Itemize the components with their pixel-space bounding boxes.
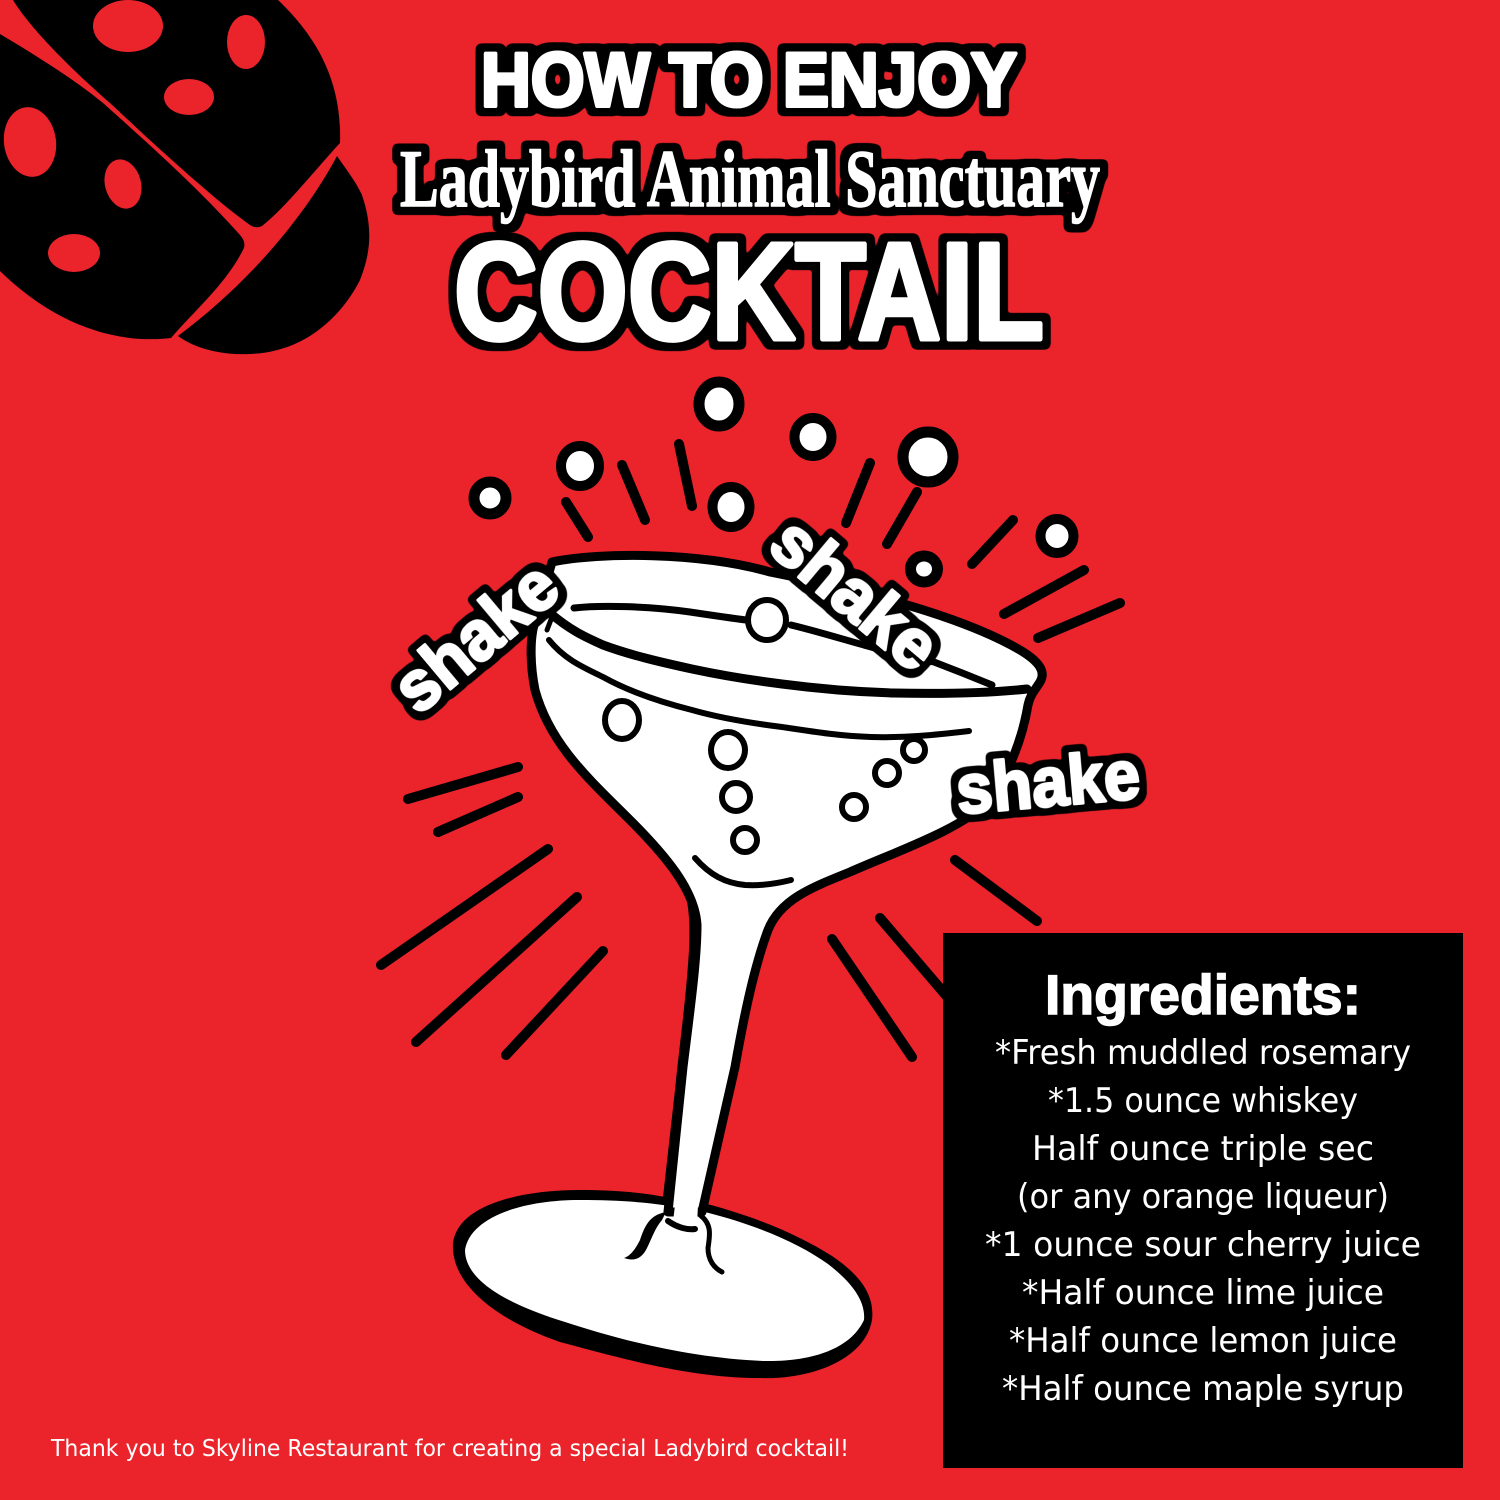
- ingredient list: *Half ounce maple syrup: [1002, 1369, 1404, 1409]
- label: shake left: shake: [378, 546, 573, 728]
- icon: ladybird: [0, 0, 369, 354]
- glass foot: [453, 1190, 872, 1378]
- glass body: [531, 555, 1042, 1212]
- ingredient list: *Half ounce lemon juice: [1009, 1321, 1397, 1361]
- title: [400, 38, 1100, 369]
- stem left thick edge: [596, 785, 698, 1197]
- panel: ingredients: [943, 933, 1463, 1468]
- ingredient list: (or any orange liqueur): [1017, 1177, 1389, 1217]
- ingredient list: *1.5 ounce whiskey: [1048, 1081, 1358, 1121]
- bubbles in glass: [605, 600, 925, 852]
- title: COCKTAIL: [454, 215, 1044, 369]
- ingredient list: *Fresh muddled rosemary: [995, 1033, 1411, 1073]
- label: shake right: shake: [953, 735, 1143, 829]
- ingredient list: [985, 1033, 1421, 1409]
- ingredient list: *1 ounce sour cherry juice: [985, 1225, 1421, 1265]
- ingredient list: Half ounce triple sec: [1032, 1129, 1374, 1169]
- heading: ingredients: Ingredients:: [1045, 963, 1361, 1026]
- stem left foot curl: [624, 1212, 666, 1260]
- credit text: Thank you to Skyline Restaurant for creating a special Ladybird cocktail!: [50, 1436, 849, 1462]
- ingredient list: *Half ounce lime juice: [1022, 1273, 1384, 1313]
- title: Ladybird Animal Sanctuary: [400, 133, 1100, 224]
- bubbles above glass: [474, 382, 1074, 582]
- title: HOW TO ENJOY: [481, 38, 1017, 123]
- glass details: [547, 606, 1027, 1272]
- stem base cover: [673, 1205, 698, 1224]
- motion lines: [381, 444, 1120, 1057]
- illustration: cocktail glass: [453, 555, 1042, 1378]
- label: shake top: shake: [756, 501, 955, 686]
